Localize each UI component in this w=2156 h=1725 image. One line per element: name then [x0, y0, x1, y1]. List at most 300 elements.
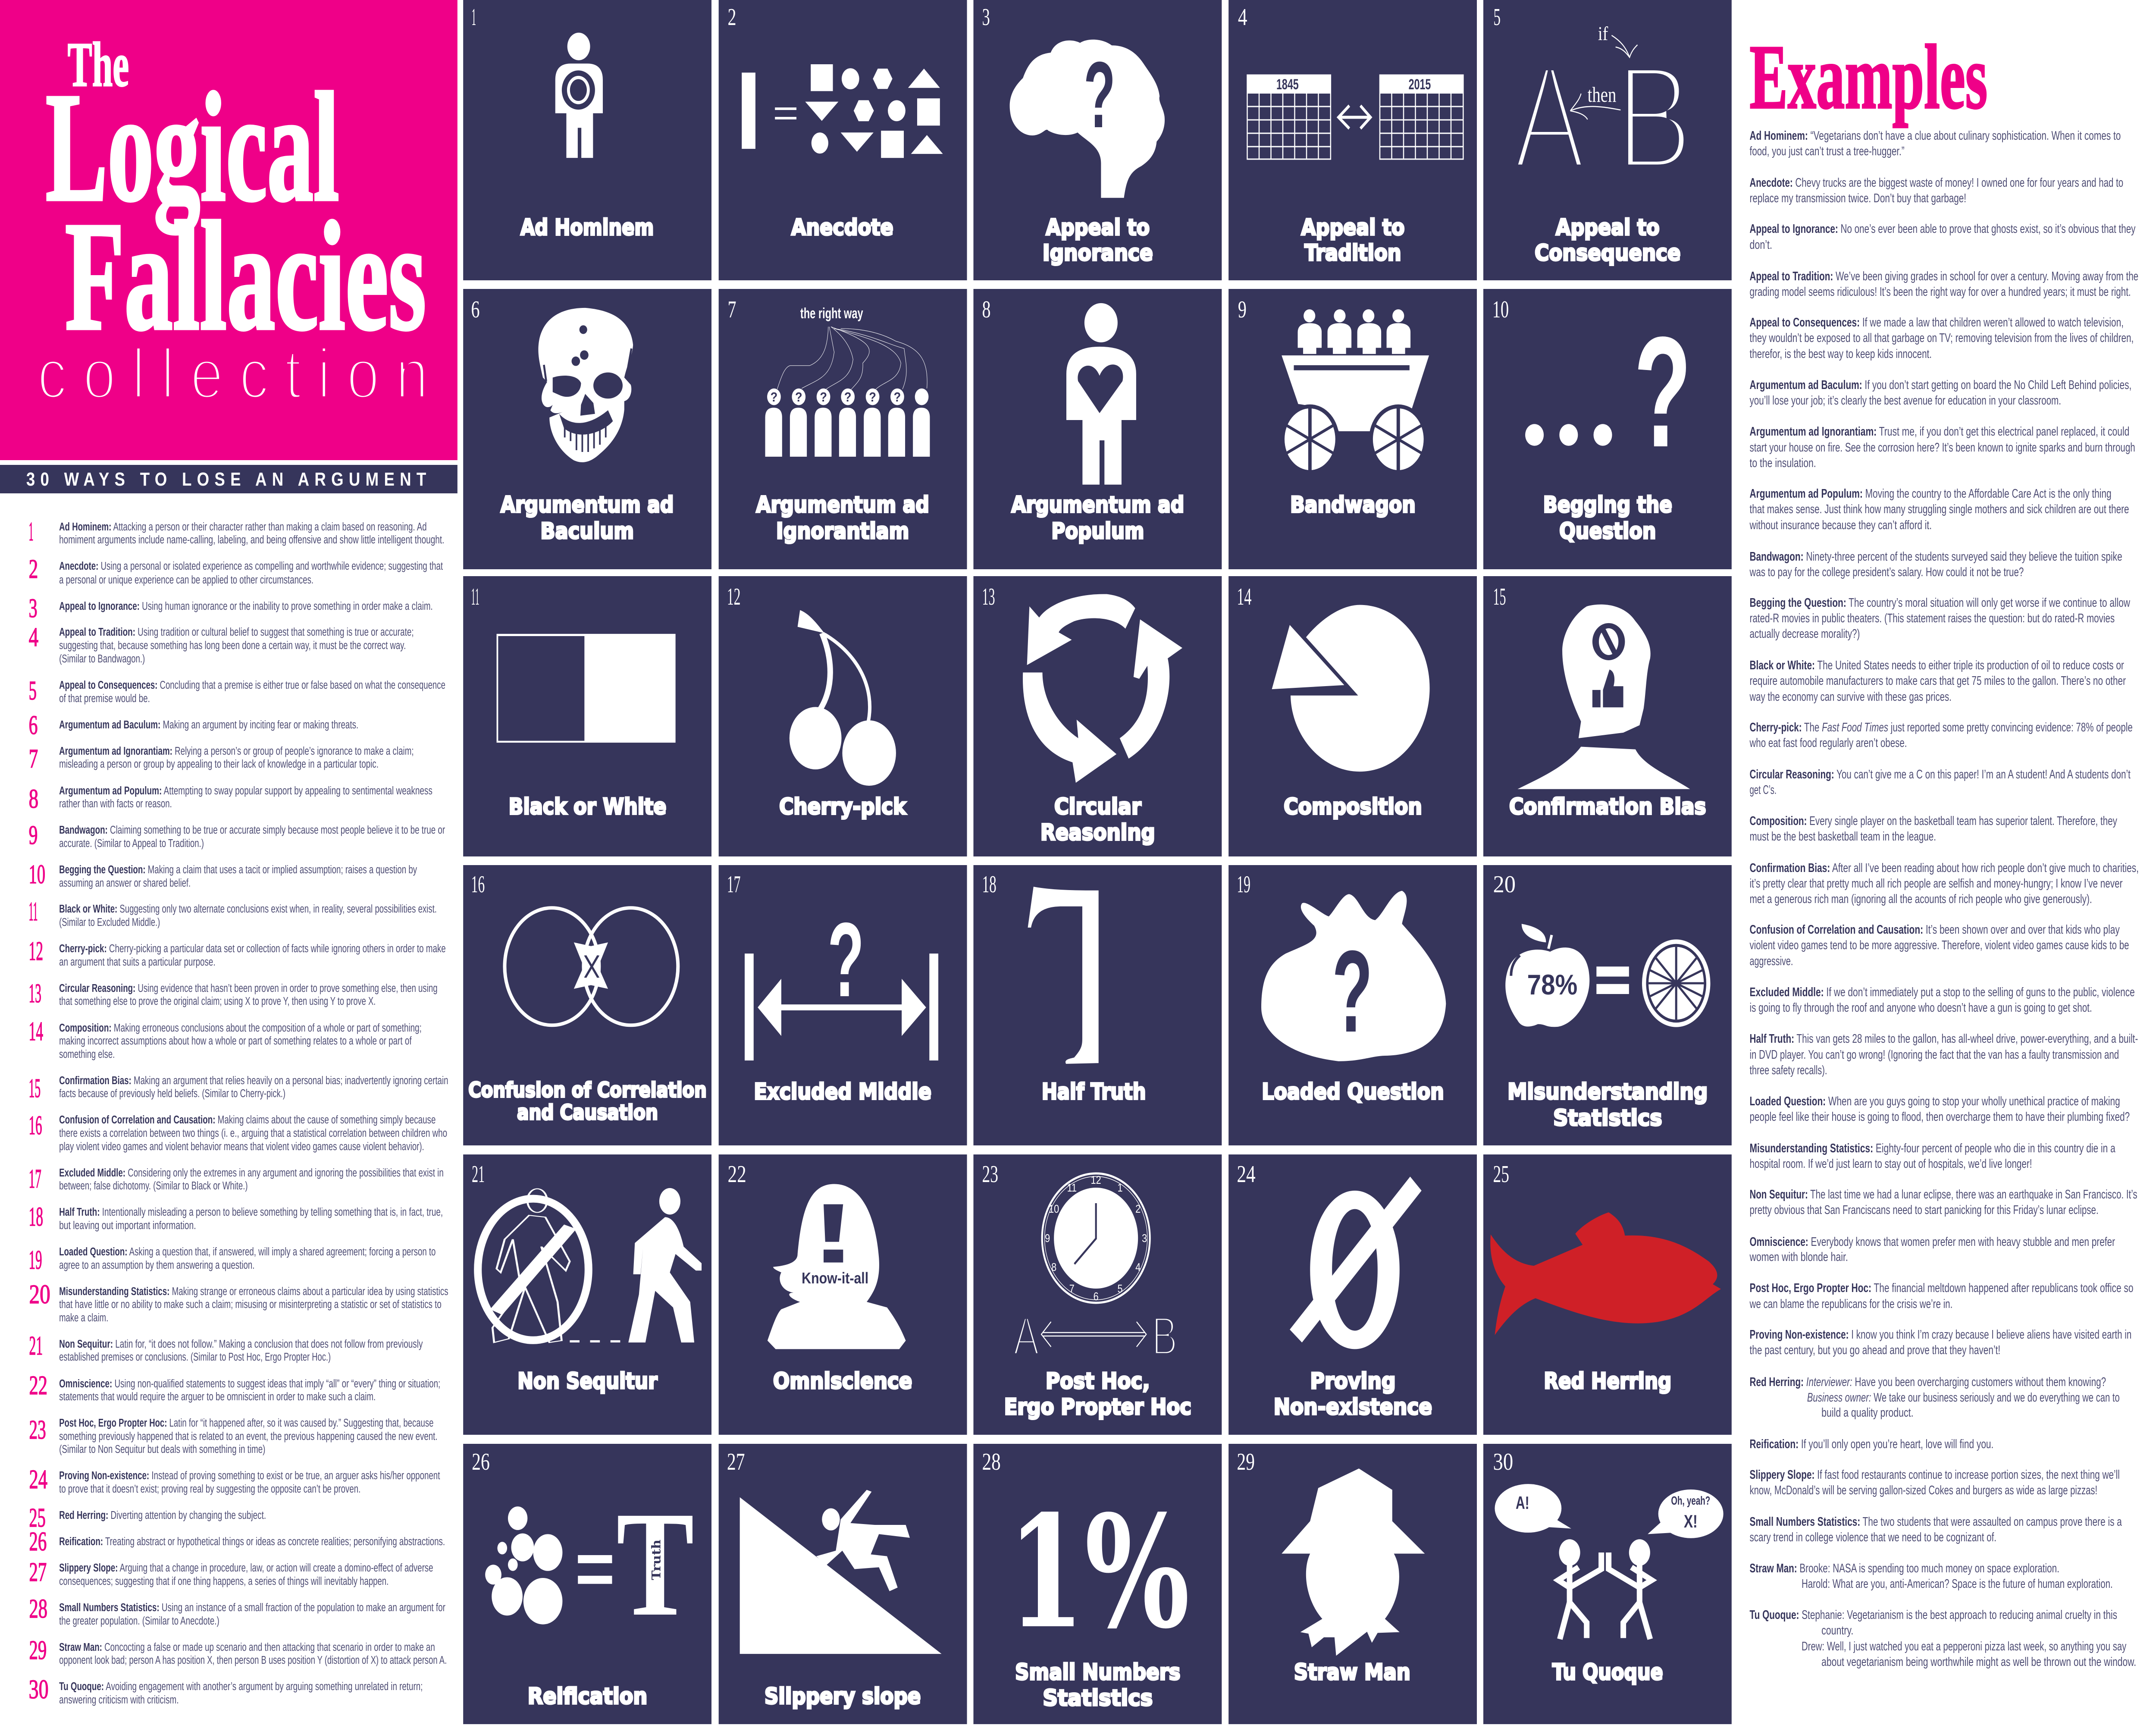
examples text: way the economy can survive with these gas prices.	[1749, 690, 1952, 704]
card 9: Bandwagon: 9	[1238, 296, 1247, 323]
definition text: Confirmation Bias: Making an argument that relies heavily on a personal bias; inadvertently ignoring certain	[59, 1074, 448, 1087]
icon: arrow between bars with question mark	[745, 900, 938, 1060]
icon: figure falling down slope	[740, 1490, 942, 1654]
definition text: a personal or unique experience can be applied to other circumstances.	[59, 574, 313, 586]
card 20: Misunderstanding Statistics: 20	[1493, 871, 1516, 898]
card 18: Half Truth	[974, 865, 1222, 1145]
card 30: Tu Quoque	[1483, 1444, 1732, 1724]
definition text: Circular Reasoning: Using evidence that hasn’t been proven in order to prove something else, then using	[59, 982, 438, 995]
item numbers: 10	[29, 860, 45, 889]
icon: half black half white rectangle	[497, 634, 676, 743]
card 14: Composition: Composition	[1284, 794, 1422, 820]
card 21: Non Sequitur: Non Sequitur	[517, 1368, 658, 1394]
card 13: Circular Reasoning	[974, 576, 1222, 856]
subtitle bar: 30 WAYS TO LOSE AN ARGUMENT	[26, 468, 426, 490]
icon: clock and A to B arrow: 7	[1069, 1283, 1075, 1295]
title: Logical: Logical	[46, 61, 339, 236]
icon: clock and A to B arrow: 2	[1135, 1203, 1141, 1216]
definition text: Ad Hominem: Attacking a person or their character rather than making a claim based on reasoning. Ad	[59, 521, 427, 533]
examples text: aggressive.	[1750, 954, 1793, 968]
card 19: Loaded Question	[1228, 865, 1477, 1145]
card 29: Straw Man	[1228, 1444, 1477, 1724]
item numbers: 3	[29, 594, 38, 623]
card 7: Argumentum ad Ignorantiam	[719, 289, 967, 569]
icon: one equals many shapes	[742, 64, 943, 158]
definition text: Appeal to Ignorance: Using human ignorance or the inability to prove something in order make a claim.	[59, 600, 433, 613]
card 11: Black or White: Black or White	[509, 794, 666, 820]
card 6: Argumentum ad Baculum: Argumentum ad	[501, 492, 674, 518]
card 13: Circular Reasoning: Reasoning	[1040, 820, 1155, 846]
card 26: Reification: Reification	[528, 1684, 647, 1709]
card 19: Loaded Question: Loaded Question	[1262, 1079, 1444, 1105]
item numbers: 13	[29, 979, 41, 1008]
card 8: Argumentum ad Populum: 8	[982, 296, 991, 323]
icon: arrow between bars with question mark: ?	[827, 900, 864, 1019]
icon: A then B	[1514, 23, 1693, 201]
icon: people following the right way: ?	[771, 390, 777, 405]
item numbers	[29, 517, 50, 1704]
icon: wagon with people	[1281, 309, 1429, 474]
item numbers: 4	[29, 623, 38, 652]
item numbers: 28	[29, 1594, 47, 1624]
definition text: statements that would require the arguer to be omniscient in order to make such a claim.	[59, 1390, 376, 1403]
icon: clock and A to B arrow: 11	[1067, 1182, 1077, 1195]
card 15: Confirmation Bias: Confirmation Bias	[1509, 794, 1706, 820]
card 14: Composition: 14	[1237, 583, 1252, 610]
icon: people following the right way: ?	[795, 390, 802, 405]
examples text: met a generous rich man (ignoring all the acounts of rich people who give generously).	[1750, 892, 2092, 906]
card 14: Composition	[1228, 576, 1477, 856]
card 2: Anecdote	[719, 0, 967, 280]
title block	[0, 0, 458, 460]
card 22: Omniscience: Omniscience	[773, 1368, 912, 1394]
definition text: consequences; suggesting that if one thing happens, a series of things will inevitably happen.	[59, 1575, 389, 1588]
definition text: Loaded Question: Asking a question that, if answered, will imply a shared agreement; forcing a person to	[59, 1245, 436, 1258]
item numbers: 6	[29, 711, 38, 740]
card 6: Argumentum ad Baculum	[463, 289, 711, 569]
card 10: Begging the Question: Begging the	[1543, 492, 1672, 518]
definition text: Composition: Making erroneous conclusions about the composition of a whole or part of something;	[59, 1022, 422, 1035]
card 24: Proving Non-existence: Non-existence	[1274, 1394, 1432, 1420]
definition text: Omniscience: Using non-qualified statements to suggest ideas that imply “all” or “every” thing or situation;	[59, 1377, 440, 1390]
icon: A then B: B	[1616, 34, 1693, 201]
definition text: Argumentum ad Populum: Attempting to sway popular support by appealing to sentimental weakness	[59, 784, 432, 797]
title: Fallacies: Fallacies	[65, 190, 426, 363]
definition text: Half Truth: Intentionally misleading a person to believe something by telling something that is, in fact, true,	[59, 1206, 443, 1219]
icon: crossed zero	[1290, 1176, 1422, 1349]
icon: arguing stick figures: Oh, yeah?	[1671, 1494, 1710, 1508]
definition text: Misunderstanding Statistics: Making strange or erroneous claims about a particular idea by using statistics	[59, 1285, 448, 1298]
icon: A then B: then	[1588, 82, 1616, 107]
examples text: therefor, is the best way to keep kids innocent.	[1750, 347, 1932, 361]
icon: bubbles equal Truth: Truth	[649, 1540, 664, 1580]
card 19: Loaded Question: 19	[1237, 871, 1250, 898]
card 18: Half Truth: Half Truth	[1042, 1079, 1146, 1105]
examples text: you’ll lose your job; it’s clearly the best avenue for education in your classroom.	[1750, 393, 2061, 408]
item numbers: 18	[29, 1202, 43, 1232]
examples text	[1749, 129, 2139, 1669]
definition text: accurate. (Similar to Appeal to Tradition.)	[59, 837, 204, 850]
card 1: Ad Hominem: Ad Hominem	[520, 215, 654, 241]
definition text: Anecdote: Using a personal or isolated experience as compelling and worthwhile evidence; suggesting that	[59, 560, 443, 573]
card 6: Argumentum ad Baculum: Baculum	[540, 518, 634, 544]
item numbers: 26	[29, 1527, 47, 1556]
card 4: Appeal to Tradition	[1228, 0, 1477, 280]
definition text: Slippery Slope: Arguing that a change in procedure, law, or action will create a domino-effect of adverse	[59, 1562, 433, 1574]
card 8: Argumentum ad Populum: Argumentum ad	[1011, 492, 1184, 518]
item numbers: 5	[29, 676, 37, 706]
icon: clock and A to B arrow: A	[1013, 1306, 1039, 1366]
card 29: Straw Man: Straw Man	[1294, 1659, 1410, 1685]
definition text: answering criticism with criticism.	[59, 1694, 179, 1706]
card 26: Reification: 26	[472, 1449, 490, 1475]
examples text: Loaded Question: When are you guys going to stop your wholly unethical practice of making	[1750, 1094, 2120, 1108]
item numbers: 15	[29, 1074, 41, 1103]
definition text: of that premise would be.	[59, 692, 150, 705]
definition text: facts because of previously held beliefs. (Similar to Cherry-pick.)	[59, 1087, 285, 1100]
card 3: Appeal to Ignorance	[974, 0, 1222, 280]
card 23: Post Hoc, Ergo Propter Hoc: Post Hoc,	[1046, 1368, 1150, 1394]
card 11: Black or White	[463, 576, 711, 856]
item numbers: 25	[29, 1503, 46, 1533]
card 4: Appeal to Tradition: Appeal to	[1301, 215, 1404, 241]
icon: red fish	[1490, 1212, 1721, 1335]
icon: clock and A to B arrow: 12	[1091, 1174, 1101, 1187]
item numbers: 2	[29, 555, 38, 584]
definition text: Small Numbers Statistics: Using an instance of a small fraction of the population to make an argument for	[59, 1601, 445, 1614]
examples text: three safety recalls).	[1750, 1063, 1827, 1077]
examples text: Argumentum ad Populum: Moving the country to the Affordable Care Act is the only thing	[1750, 486, 2112, 501]
icon: people following the right way: the right way	[800, 305, 863, 322]
icon: half letter T	[1028, 887, 1099, 1064]
card 30: Tu Quoque: Tu Quoque	[1552, 1659, 1663, 1685]
card 1: Ad Hominem: 1	[471, 4, 476, 31]
definition text: but leaving out important information.	[59, 1219, 196, 1232]
card 26: Reification	[463, 1444, 711, 1724]
item numbers: 12	[29, 937, 43, 966]
card 5: Appeal to Consequence: Appeal to	[1556, 215, 1660, 241]
card 27: Slippery slope	[719, 1444, 967, 1724]
icon: people following the right way: ?	[820, 390, 827, 405]
card 9: Bandwagon: Bandwagon	[1290, 492, 1416, 518]
examples text: Appeal to Consequences: If we made a law that children weren’t allowed to watch television,	[1750, 315, 2124, 329]
card 2: Anecdote: 2	[728, 4, 736, 31]
card 3: Appeal to Ignorance: Ignorance	[1043, 240, 1153, 266]
definition text: Confusion of Correlation and Causation: Making claims about the cause of something simply because	[59, 1113, 436, 1126]
card 1: Ad Hominem	[463, 0, 711, 280]
icon: people following the right way: ?	[844, 390, 852, 405]
icon: two calendars	[1247, 75, 1463, 159]
card 25: Red Herring: 25	[1493, 1161, 1509, 1188]
examples text: must be the best basketball team in the league.	[1750, 829, 1936, 844]
definition text: make a claim.	[59, 1311, 108, 1324]
icon: apple equals orange	[1505, 924, 1710, 1027]
definition text: Appeal to Consequences: Concluding that a premise is either true or false based on what the consequence	[59, 679, 445, 692]
card 8: Argumentum ad Populum: Populum	[1051, 518, 1144, 544]
card 27: Slippery slope: Slippery slope	[765, 1684, 921, 1709]
examples text: Argumentum ad Ignorantiam: Trust me, if you don’t get this electrical panel replaced, it could	[1750, 424, 2129, 439]
definition text: Post Hoc, Ergo Propter Hoc: Latin for “it happened after, so it was caused by.” Suggesting that, because	[59, 1417, 433, 1430]
card 9: Bandwagon	[1228, 289, 1477, 569]
definition text: Argumentum ad Ignorantiam: Relying a person’s or group of people’s ignorance to make a claim;	[59, 745, 414, 758]
card 16: Confusion of Correlation and Causation: and Causation	[517, 1101, 658, 1125]
examples text: food, you just can’t trust a tree-hugger.”	[1750, 144, 1905, 158]
card 8: Argumentum ad Populum	[974, 289, 1222, 569]
card 24: Proving Non-existence	[1228, 1154, 1477, 1435]
icon: arguing stick figures: X!	[1684, 1512, 1698, 1532]
card 11: Black or White: 11	[471, 583, 479, 610]
card 3: Appeal to Ignorance: Appeal to	[1046, 215, 1150, 241]
card 7: Argumentum ad Ignorantiam: Argumentum ad	[756, 492, 929, 518]
icon: apple equals orange: 78%	[1527, 969, 1577, 1000]
icon: know-it-all bust: Know-it-all	[802, 1270, 868, 1287]
icon: banned walker and walker	[478, 1188, 702, 1342]
card 28: Small Numbers Statistics: 28	[982, 1449, 1001, 1475]
definition text: the greater population. (Similar to Anecdote.)	[59, 1615, 219, 1628]
icon: person with heart	[1066, 303, 1136, 485]
card 5: Appeal to Consequence	[1483, 0, 1732, 280]
examples text: Omniscience: Everybody knows that women prefer men with heavy stubble and men prefer	[1750, 1235, 2115, 1249]
definition text: assuming an answer or shared belief.	[59, 877, 191, 890]
title: The: The	[68, 30, 129, 100]
icon: skull	[538, 308, 633, 462]
item numbers: 20	[29, 1280, 50, 1309]
card 28: Small Numbers Statistics: Statistics	[1043, 1685, 1153, 1711]
examples text: country.	[1821, 1623, 1853, 1637]
examples text: scary trend in college violence that we need to be cognizant of.	[1750, 1530, 1996, 1544]
definition text: (Similar to Non Sequitur but deals with something in time)	[59, 1443, 265, 1456]
card 15: Confirmation Bias: 15	[1493, 583, 1506, 610]
item numbers: 29	[29, 1636, 47, 1665]
card 16: Confusion of Correlation and Causation	[463, 865, 711, 1145]
card 30: Tu Quoque: 30	[1493, 1449, 1513, 1475]
examples text: build a quality product.	[1821, 1405, 1914, 1420]
icon: overlapping circles with star	[505, 908, 678, 1025]
examples heading: Examples	[1750, 26, 1987, 128]
icon: pie chart with slice	[1272, 605, 1430, 772]
card 10: Begging the Question: 10	[1492, 296, 1509, 323]
card 28: Small Numbers Statistics	[974, 1444, 1222, 1724]
icon: clock and A to B arrow: 1	[1117, 1182, 1123, 1195]
card 28: Small Numbers Statistics: Small Numbers	[1015, 1659, 1181, 1685]
card 27: Slippery slope: 27	[727, 1449, 745, 1475]
definition text: rather than with facts or reason.	[59, 797, 172, 810]
examples text: Confusion of Correlation and Causation: It’s been shown over and over that kids who play	[1750, 922, 2120, 937]
card 23: Post Hoc, Ergo Propter Hoc	[974, 1154, 1222, 1435]
item numbers: 7	[29, 744, 38, 774]
card 24: Proving Non-existence: 24	[1237, 1161, 1256, 1188]
examples text: Straw Man: Brooke: NASA is spending too much money on space exploration.	[1750, 1561, 2059, 1575]
item numbers: 1	[29, 517, 34, 546]
item numbers: 19	[29, 1245, 42, 1275]
definition text: suggesting that, because something has long been done a certain way, it must be the correct way.	[59, 639, 406, 652]
icon: two calendars: 2015	[1409, 76, 1431, 93]
icon: two calendars: 1845	[1276, 76, 1299, 93]
definition text: Proving Non-existence: Instead of proving something to exist or be true, an arguer asks his/her opponent	[59, 1469, 440, 1482]
card 5: Appeal to Consequence: Consequence	[1535, 240, 1680, 266]
card 12: Cherry-pick	[719, 576, 967, 856]
card 10: Begging the Question	[1483, 289, 1732, 569]
item numbers: 24	[29, 1465, 47, 1494]
examples text: know, McDonald’s will be serving gallon-sized Cokes and burgers as wide as large pizzas!	[1750, 1483, 2097, 1497]
card 4: Appeal to Tradition: 4	[1238, 4, 1247, 31]
examples text: pretty obvious that San Franciscans need to start panicking for this Friday’s lunar eclipse.	[1750, 1203, 2099, 1217]
icon: people following the right way: ?	[894, 390, 901, 405]
icon: dots and question mark	[1525, 304, 1692, 480]
icon: dots and question mark: ?	[1634, 304, 1692, 480]
icon: person target	[555, 33, 603, 158]
item numbers: 8	[29, 784, 38, 814]
examples text: the past century, but you go ahead and prove that they haven’t!	[1750, 1343, 2000, 1357]
icon: clock and A to B arrow: 5	[1117, 1283, 1123, 1295]
definition text: something previously happened that is related to an event, the previous happening caused the new event.	[59, 1430, 438, 1443]
definition text: Tu Quoque: Avoiding engagement with another’s argument by arguing something unrelated in return;	[59, 1680, 423, 1693]
icon: clock and A to B arrow: 8	[1051, 1261, 1056, 1274]
icon: bubbles equal Truth: T	[616, 1480, 694, 1647]
icon: people following the right way	[765, 305, 930, 457]
card 17: Excluded Middle: 17	[727, 871, 741, 898]
definition text: to prove that it doesn’t exist; proving real by suggesting the opposite can’t be proven.	[59, 1483, 360, 1496]
card 20: Misunderstanding Statistics: Statistics	[1553, 1105, 1662, 1131]
examples text: Red Herring: Interviewer: Have you been overcharging customers without them knowing?	[1750, 1375, 2106, 1389]
examples text: get C’s.	[1750, 783, 1777, 797]
examples text: replace my transmission twice. Don’t buy that garbage!	[1750, 191, 1966, 205]
definition text: opponent look bad; person A has position X, then person B uses position Y (distortion of X) to attack person A.	[59, 1654, 447, 1667]
icon: three circular arrows	[1023, 594, 1182, 783]
card 5: Appeal to Consequence: 5	[1493, 4, 1501, 31]
item numbers: 23	[29, 1415, 46, 1445]
icon: sack with question mark	[1261, 891, 1446, 1061]
definition text: Straw Man: Concocting a false or made up scenario and then attacking that scenario in order to make an	[59, 1641, 435, 1654]
title: collection: collection	[38, 334, 428, 413]
card 7: Argumentum ad Ignorantiam: 7	[728, 296, 736, 323]
item numbers: 22	[29, 1371, 47, 1400]
card 20: Misunderstanding Statistics	[1483, 865, 1732, 1145]
definition text: Black or White: Suggesting only two alternate conclusions exist when, in reality, several possibilities exist.	[59, 903, 437, 916]
definition text: misleading a person or group by appealing to their lack of knowledge in a particular topic.	[59, 758, 379, 771]
card 18: Half Truth: 18	[982, 871, 997, 898]
icon: brain with question mark	[1010, 40, 1165, 198]
icon: A then B: A	[1514, 34, 1586, 201]
definition text: Begging the Question: Making a claim that uses a tacit or implied assumption; raises a question by	[59, 863, 417, 876]
definition text: Non Sequitur: Latin for, “it does not follow.” Making a conclusion that does not follow from previously	[59, 1338, 423, 1351]
definition text: Argumentum ad Baculum: Making an argument by inciting fear or making threats.	[59, 718, 358, 731]
item numbers: 14	[29, 1017, 43, 1046]
definition text: Reification: Treating abstract or hypothetical things or ideas as concrete realities; personifying abstractions.	[59, 1535, 445, 1548]
card 6: Argumentum ad Baculum: 6	[471, 296, 479, 323]
examples text: hospital room. If we’d just learn to stay out of hospitals, we’d live longer!	[1750, 1157, 2032, 1171]
card 29: Straw Man: 29	[1237, 1449, 1255, 1475]
item numbers: 21	[29, 1331, 43, 1361]
item numbers: 9	[29, 821, 38, 850]
examples text: actually decrease morality?)	[1750, 627, 1860, 641]
card 16: Confusion of Correlation and Causation: 16	[471, 871, 485, 898]
icon: clock and A to B arrow: 4	[1135, 1261, 1141, 1274]
card 15: Confirmation Bias	[1483, 576, 1732, 856]
icon: clock and A to B arrow: B	[1152, 1306, 1178, 1366]
icon: sack with question mark: ?	[1332, 926, 1373, 1057]
item numbers: 11	[29, 897, 38, 926]
examples text: don’t.	[1750, 238, 1772, 252]
definition text: Excluded Middle: Considering only the extremes in any argument and ignoring the possibilities that exist in	[59, 1167, 444, 1179]
icon: clock and A to B arrow: 10	[1049, 1203, 1059, 1216]
icon: straw man silhouette	[1282, 1468, 1425, 1656]
definition text: (Similar to Excluded Middle.)	[59, 916, 160, 929]
card 2: Anecdote: Anecdote	[791, 215, 893, 241]
card 13: Circular Reasoning: Circular	[1054, 794, 1141, 820]
definition text: Cherry-pick: Cherry-picking a particular data set or collection of facts while ignoring others in order to make	[59, 942, 446, 955]
card 12: Cherry-pick: Cherry-pick	[779, 794, 906, 820]
definition text: agree to an assumption by them answering a question.	[59, 1259, 254, 1272]
item numbers: 30	[29, 1675, 49, 1704]
card 3: Appeal to Ignorance: 3	[982, 4, 990, 31]
definition text: (Similar to Bandwagon.)	[59, 652, 145, 665]
definition text: Appeal to Tradition: Using tradition or cultural belief to suggest that something is true or accurate;	[59, 626, 414, 639]
examples text: we can blame the republicans for the crisis we’re in.	[1749, 1297, 1952, 1311]
card 25: Red Herring	[1483, 1154, 1732, 1435]
card 17: Excluded Middle	[719, 865, 967, 1145]
card 25: Red Herring: Red Herring	[1544, 1368, 1671, 1394]
icon: clock and A to B arrow: 6	[1094, 1290, 1099, 1303]
card 20: Misunderstanding Statistics: Misunderstanding	[1507, 1079, 1708, 1105]
icon: arguing stick figures	[1495, 1484, 1724, 1639]
definition text: between; false dichotomy. (Similar to Black or White.)	[59, 1179, 248, 1192]
fallacy definitions list	[29, 517, 448, 1706]
item numbers: 27	[29, 1558, 47, 1587]
definition text: there exists a correlation between two things (i. e., arguing that a statistical correlation between children who	[59, 1127, 447, 1140]
examples text: to the insulation.	[1750, 456, 1816, 470]
card 23: Post Hoc, Ergo Propter Hoc: Ergo Propter Hoc	[1004, 1394, 1191, 1420]
card 13: Circular Reasoning: 13	[982, 583, 995, 610]
card 10: Begging the Question: Question	[1559, 518, 1656, 544]
examples text: is going to fly through the roof and anyone who doesn’t have a gun is going to get shot.	[1750, 1000, 2092, 1015]
icon: arguing stick figures: A!	[1516, 1493, 1529, 1513]
card 16: Confusion of Correlation and Causation: Confusion of Correlation	[468, 1079, 707, 1102]
definition text: something else.	[59, 1048, 115, 1061]
item numbers: 16	[29, 1111, 42, 1140]
subtitle bar	[0, 465, 458, 493]
examples text: Small Numbers Statistics: The two students that were assaulted on campus prove there is a	[1750, 1515, 2122, 1529]
card 21: Non Sequitur: 21	[472, 1161, 485, 1188]
card 17: Excluded Middle: Excluded Middle	[754, 1079, 931, 1105]
icon: know-it-all bust	[768, 1184, 906, 1349]
icon: A then B: if	[1598, 23, 1608, 45]
card 21: Non Sequitur	[463, 1154, 711, 1435]
card 22: Omniscience: 22	[728, 1161, 746, 1188]
card 23: Post Hoc, Ergo Propter Hoc: 23	[982, 1161, 998, 1188]
icon: clock and A to B arrow: 3	[1142, 1232, 1147, 1245]
icon: one percent: 1%	[1008, 1481, 1190, 1663]
definition text: Red Herring: Diverting attention by changing the subject.	[59, 1509, 266, 1522]
definition text: Bandwagon: Claiming something to be true or accurate simply because most people believe it to be true or	[59, 824, 445, 837]
icon: brain with question mark: ?	[1084, 42, 1116, 147]
examples text: Misunderstanding Statistics: Eighty-four percent of people who die in this country die in a	[1750, 1141, 2115, 1155]
card 7: Argumentum ad Ignorantiam: Ignorantiam	[776, 518, 909, 544]
icon: cherries	[790, 610, 896, 786]
definition text: that have little or no ability to make such a claim; misusing or misinterpreting a statistic or set of statistics to	[59, 1298, 442, 1311]
examples text: women with blonde hair.	[1749, 1250, 1848, 1264]
card 12: Cherry-pick: 12	[727, 583, 741, 610]
definition text: an argument that suits a particular purpose.	[59, 956, 216, 969]
definition text: making incorrect assumptions about how a whole or part of something relates to a whole or part of	[59, 1035, 412, 1048]
examples text: who eat fast food regularly aren’t obese.	[1749, 736, 1907, 750]
item numbers: 17	[29, 1164, 41, 1194]
icon: clock and A to B arrow: 9	[1045, 1232, 1050, 1245]
examples text: without insurance because they can’t afford it.	[1749, 518, 1932, 532]
icon: bubbles equal Truth	[485, 1480, 694, 1647]
examples text: was to pay for the college president’s salary. How could it not be true?	[1749, 565, 2024, 579]
icon: head with no sign and thumbs up	[1517, 605, 1690, 789]
